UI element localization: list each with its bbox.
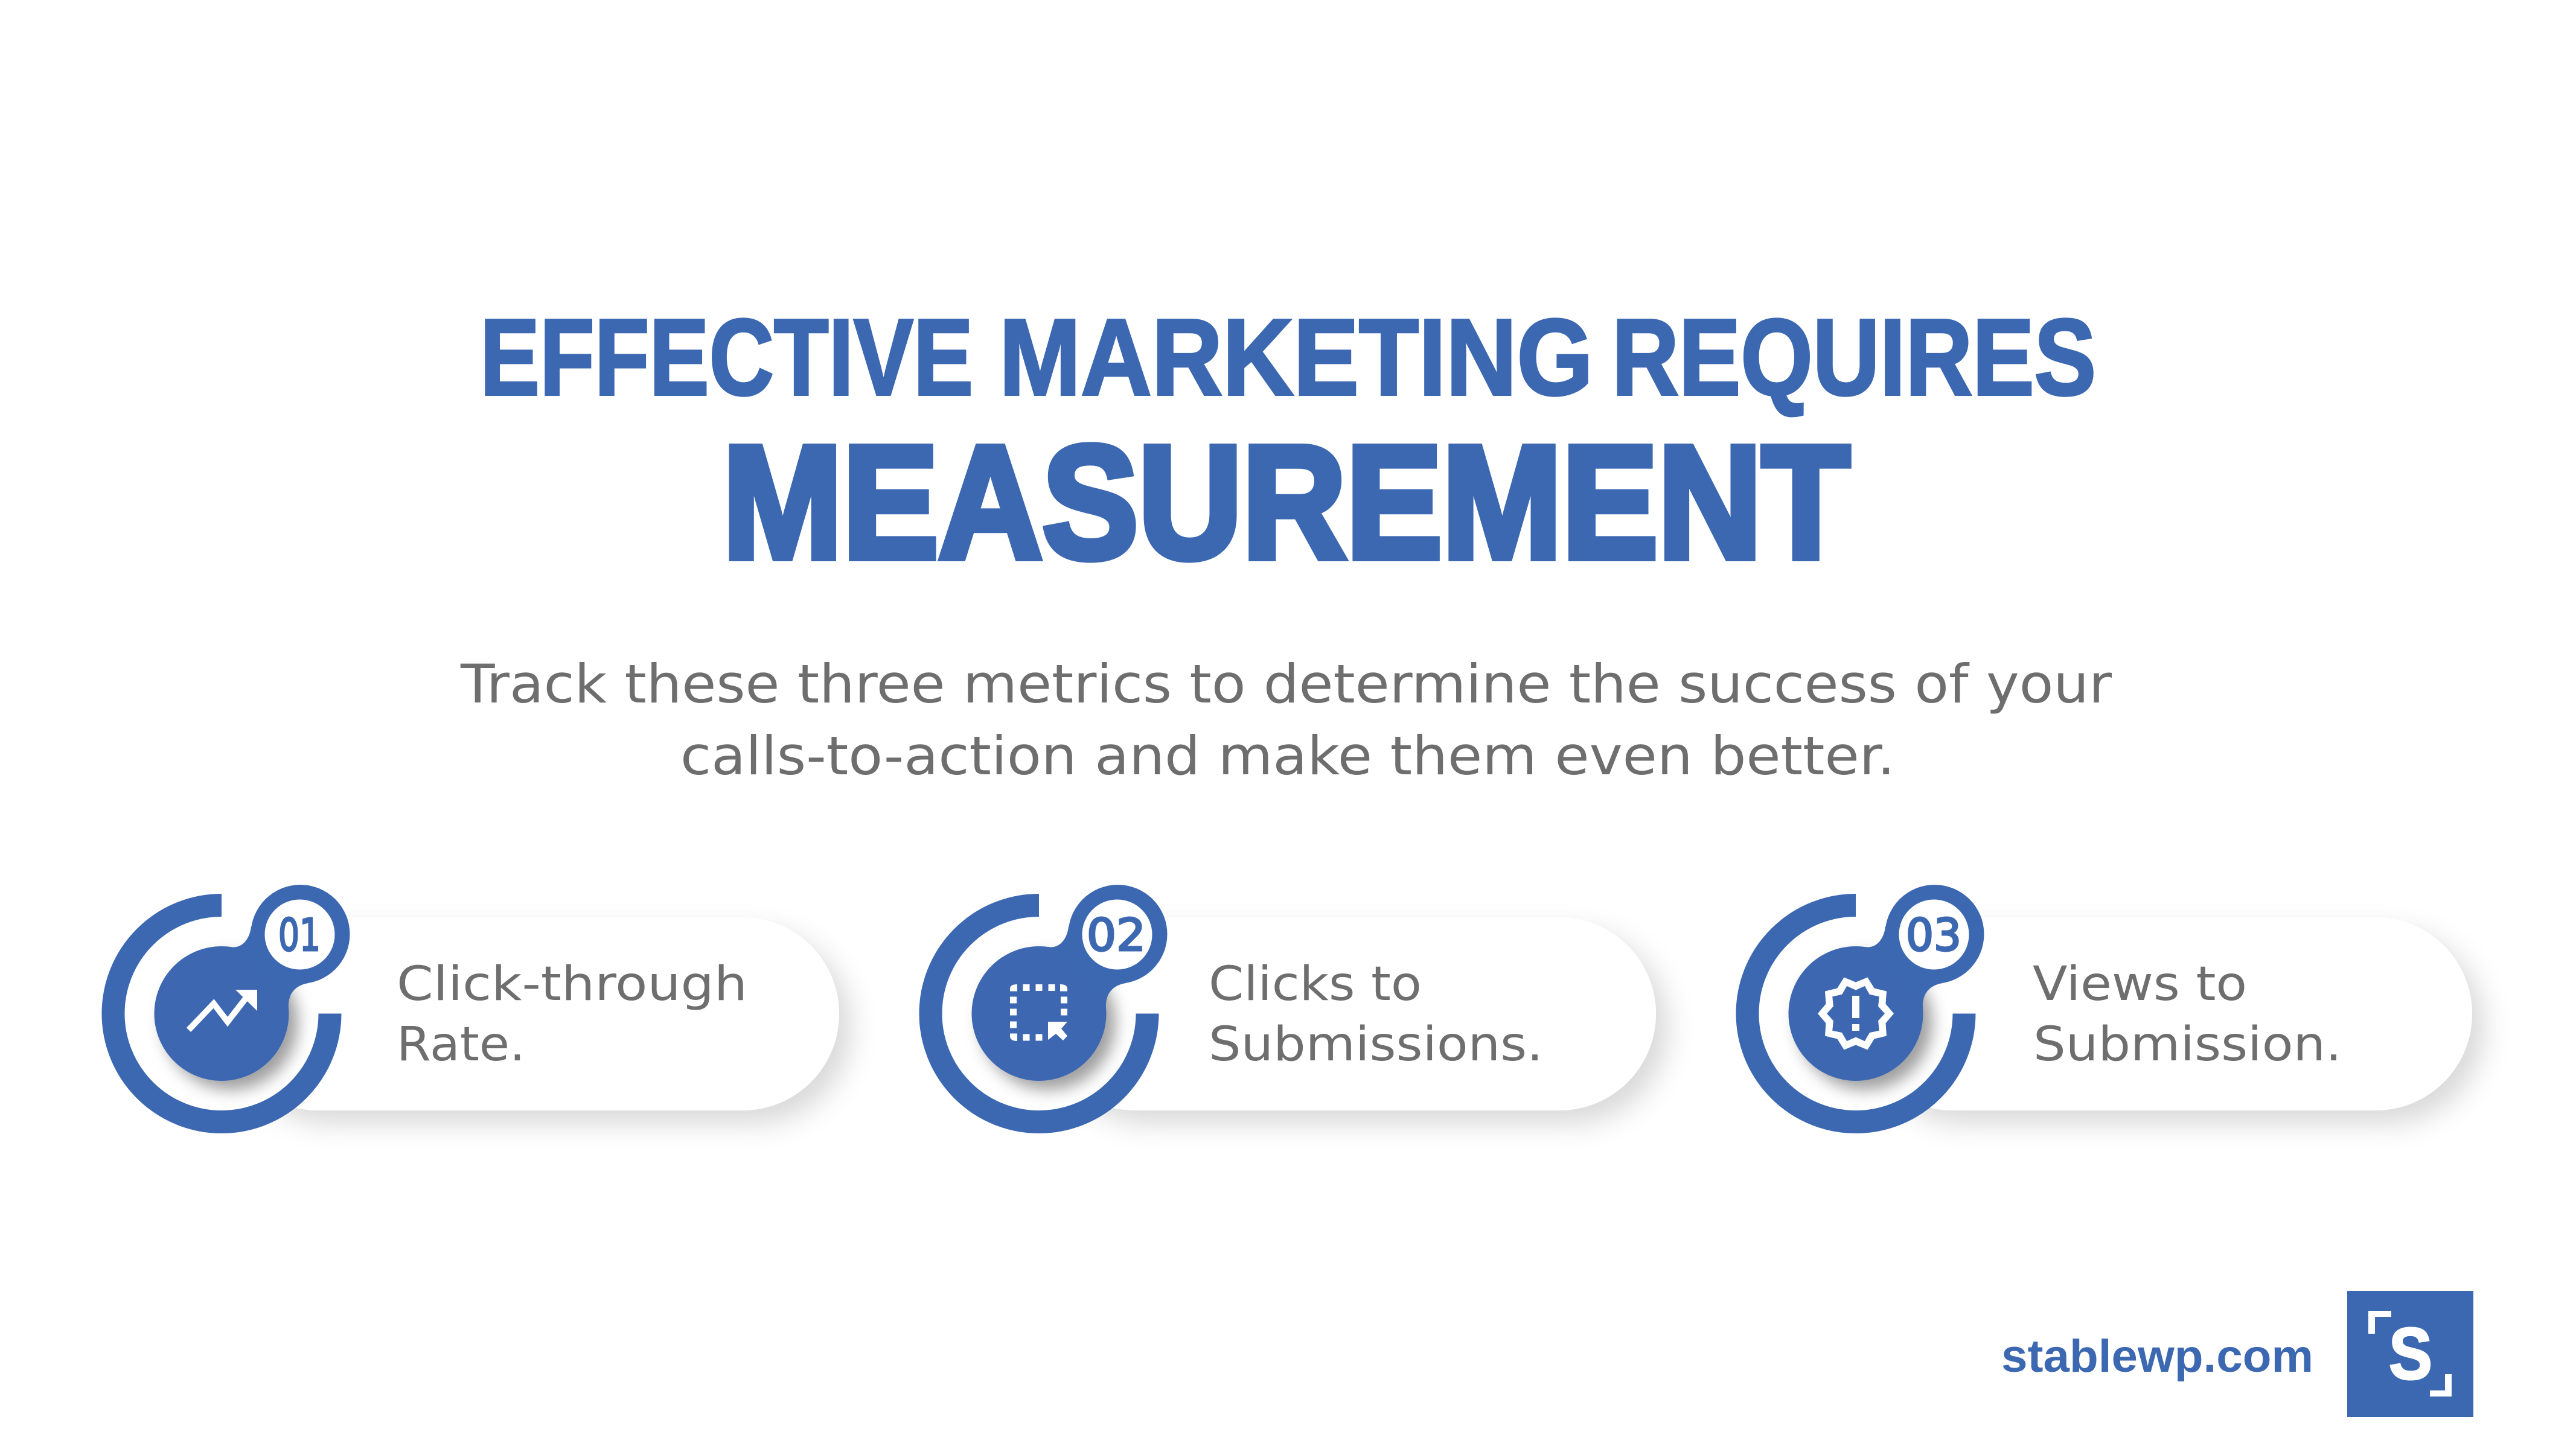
label 1: Click-through: [397, 957, 747, 1011]
logo: [2347, 1291, 2473, 1417]
brand url: stablewp.com: [2001, 1331, 2313, 1382]
title line 1: EFFECTIVE: [480, 297, 973, 418]
subtitle: calls-to-action and make them even better.: [680, 725, 1895, 787]
panel: metric 2: [919, 885, 1656, 1133]
pill 3: [1856, 917, 2472, 1110]
label 2: Submissions.: [1209, 1017, 1543, 1072]
pill 1: [222, 917, 839, 1110]
label 1: Rate.: [397, 1017, 525, 1072]
panel: metric 1: [102, 885, 839, 1133]
title line 1: [480, 297, 2096, 418]
number 01: 01: [278, 909, 321, 961]
title line 1: REQUIRES: [1612, 297, 2096, 418]
icon badge 3: [1736, 885, 1984, 1133]
label 1: [397, 957, 747, 1072]
title line 1: MARKETING: [999, 297, 1593, 418]
number 03: 03: [1906, 909, 1961, 961]
label 3: [2033, 957, 2342, 1072]
icon: alert starburst: [1818, 978, 1894, 1050]
icon: dotted selection with cursor: [1010, 984, 1067, 1041]
logo: S: [2389, 1313, 2432, 1395]
label 2: Clicks to: [1209, 957, 1422, 1011]
title line 2: MEASUREMENT: [723, 413, 1850, 592]
subtitle: Track these three metrics to determine the success of your: [460, 653, 2112, 715]
number 02: 02: [1087, 909, 1146, 961]
label 2: [1209, 957, 1543, 1072]
label 3: Submission.: [2033, 1017, 2342, 1072]
icon badge 1: [102, 885, 350, 1133]
pill 2: [1039, 917, 1656, 1110]
icon badge 2: [919, 885, 1168, 1133]
icon: trending arrow: [188, 990, 257, 1030]
label 3: Views to: [2033, 957, 2247, 1011]
panel: metric 3: [1736, 885, 2472, 1133]
subtitle: [460, 653, 2112, 787]
